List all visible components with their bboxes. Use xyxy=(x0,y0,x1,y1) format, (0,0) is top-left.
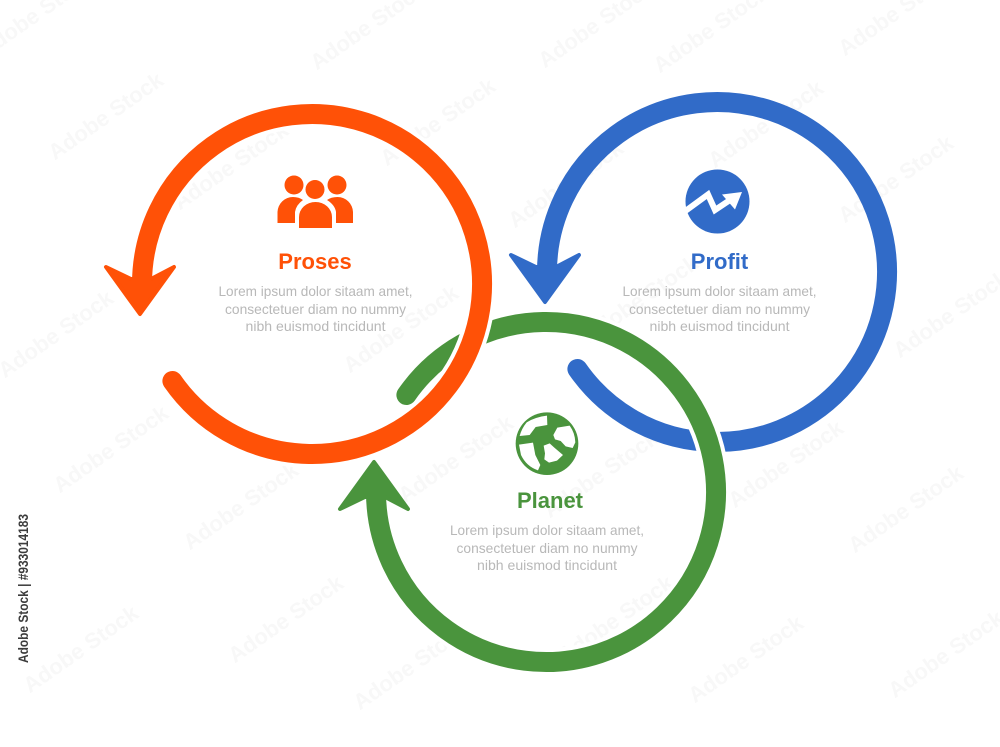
watermark pattern: Adobe Stock xyxy=(683,610,809,708)
watermark pattern: Adobe Stock xyxy=(18,600,144,698)
watermark pattern: Adobe Stock xyxy=(48,400,174,498)
heading: Planet: Planet xyxy=(517,488,584,513)
text block: Proses description: nibh euismod tincidunt xyxy=(246,318,386,334)
text block: Profit description xyxy=(622,283,816,334)
text block: Planet description: nibh euismod tincidunt xyxy=(477,557,617,573)
watermark pattern: Adobe Stock xyxy=(348,617,474,715)
watermark pattern: Adobe Stock xyxy=(393,410,519,508)
text block: Planet description xyxy=(450,522,644,573)
watermark pattern: Adobe Stock xyxy=(178,457,304,555)
icon: growth arrow in circle xyxy=(684,170,750,234)
vertical stock credit: Adobe Stock | #933014183 xyxy=(15,514,31,663)
green cycle arrow xyxy=(340,322,716,662)
text block: Profit description: Lorem ipsum dolor sitaam amet, xyxy=(622,283,816,299)
heading: Profit: Profit xyxy=(691,249,749,274)
text block: Planet description: Lorem ipsum dolor sitaam amet, xyxy=(450,522,644,538)
text block: Proses description: Lorem ipsum dolor sitaam amet, xyxy=(218,283,412,299)
watermark pattern: Adobe Stock xyxy=(538,425,664,523)
panel: Proses xyxy=(218,176,412,334)
text block: Planet description: consectetuer diam no nummy xyxy=(456,540,638,556)
watermark pattern: Adobe Stock xyxy=(723,415,849,513)
watermark pattern: Adobe Stock xyxy=(703,75,829,173)
icon: people group xyxy=(278,176,353,228)
watermark pattern: Adobe Stock xyxy=(843,460,969,558)
watermark pattern: Adobe Stock xyxy=(375,73,501,171)
orange cycle arrow xyxy=(106,114,482,454)
watermark pattern: Adobe Stock xyxy=(338,280,464,378)
watermark pattern: Adobe Stock xyxy=(168,117,294,215)
watermark pattern: Adobe Stock xyxy=(578,250,704,348)
panel: Planet xyxy=(450,412,644,573)
watermark pattern: Adobe Stock xyxy=(503,135,629,233)
heading: Proses: Proses xyxy=(278,249,352,274)
watermark pattern: Adobe Stock xyxy=(553,570,679,668)
text block: Proses description: consectetuer diam no nummy xyxy=(225,301,406,317)
icon: globe xyxy=(516,412,578,475)
watermark pattern: Adobe Stock xyxy=(833,130,959,228)
panel: Profit xyxy=(622,170,816,334)
text block: Profit description: nibh euismod tincidunt xyxy=(650,318,790,334)
watermark pattern: Adobe Stock xyxy=(223,570,349,668)
watermark pattern: Adobe Stock xyxy=(43,67,169,165)
text block: Profit description: consectetuer diam no nummy xyxy=(629,301,810,317)
blue cycle arrow xyxy=(511,102,887,442)
text block: Proses description xyxy=(218,283,412,334)
